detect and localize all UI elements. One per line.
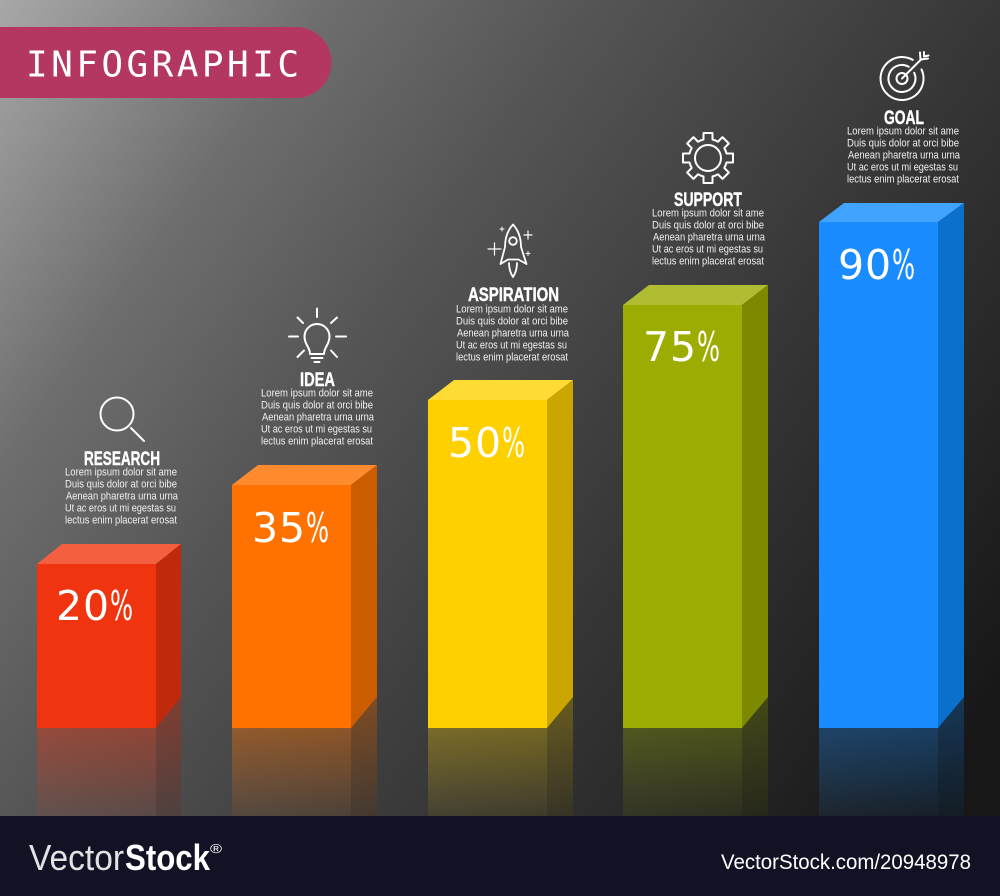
text block: goal: Lorem ipsum dolor sit ame [847, 126, 959, 138]
text block: support: Ut ac eros ut mi egestas su [652, 244, 763, 256]
footer logo: ® [210, 841, 223, 856]
percentage: 20%: % [110, 582, 133, 630]
text block: support [652, 208, 766, 268]
icon: target [881, 52, 928, 100]
3D bar: aspiration [428, 380, 573, 728]
percentage: 90% [838, 241, 915, 289]
footer logo: Vector [29, 837, 124, 878]
bar reflection: idea [232, 697, 377, 816]
text block: goal: Ut ac eros ut mi egestas su [847, 162, 958, 174]
text block: idea [261, 388, 375, 448]
text block: goal: lectus enim placerat erosat [847, 174, 959, 186]
heading: research: RESEARCH [84, 448, 160, 470]
heading: aspiration: ASPIRATION [468, 284, 559, 306]
text block: idea: lectus enim placerat erosat [261, 436, 373, 448]
3D bar: goal [819, 203, 964, 728]
text block: aspiration: Ut ac eros ut mi egestas su [456, 340, 567, 352]
text block: idea: Lorem ipsum dolor sit ame [261, 388, 373, 400]
text block: research: Lorem ipsum dolor sit ame [65, 466, 177, 478]
panel: research [37, 398, 181, 816]
percentage: 35%: % [306, 504, 329, 552]
footer image id: VectorStock.com/20948978 [721, 851, 971, 874]
text block: support: lectus enim placerat erosat [652, 256, 764, 268]
percentage: 20% [56, 582, 133, 630]
text block: idea: Aenean pharetra urna urna [262, 412, 375, 424]
text block: support: Lorem ipsum dolor sit ame [652, 208, 764, 220]
icon: rocket [488, 224, 532, 277]
heading: support: SUPPORT [674, 189, 742, 211]
text block: research: Ut ac eros ut mi egestas su [65, 502, 176, 514]
text block: aspiration: Aenean pharetra urna urna [457, 328, 570, 340]
percentage: 75%: 75 [643, 323, 696, 371]
text block: aspiration: Lorem ipsum dolor sit ame [456, 304, 568, 316]
percentage: 50%: 50 [448, 419, 501, 467]
heading: idea: IDEA [300, 369, 335, 391]
percentage: 20%: 20 [56, 582, 109, 630]
icon: light bulb [289, 308, 346, 362]
panel: aspiration [428, 224, 573, 816]
text block: idea: Duis quis dolor at orci bibe [261, 400, 373, 412]
percentage: 90%: 90 [838, 241, 891, 289]
text block: aspiration [456, 304, 570, 364]
footer band [0, 816, 1000, 896]
3D bar: support [623, 285, 768, 728]
text block: research: Aenean pharetra urna urna [66, 490, 179, 502]
icon: gear [683, 133, 733, 183]
percentage: 50%: % [502, 419, 525, 467]
panel: support [623, 133, 768, 816]
percentage: 75% [643, 323, 720, 371]
title banner [0, 27, 332, 98]
title banner: INFOGRAPHIC [26, 44, 299, 86]
percentage: 35% [252, 504, 329, 552]
text block: research: Duis quis dolor at orci bibe [65, 478, 177, 490]
text block: aspiration: lectus enim placerat erosat [456, 352, 568, 364]
percentage: 50% [448, 419, 525, 467]
text block: research: lectus enim placerat erosat [65, 514, 177, 526]
text block: research [65, 466, 179, 526]
footer logo: Stock [125, 837, 211, 878]
text block: support: Aenean pharetra urna urna [653, 232, 766, 244]
text block: idea: Ut ac eros ut mi egestas su [261, 424, 372, 436]
icon: magnifier [100, 398, 144, 441]
bar reflection: research [37, 697, 181, 816]
3D bar: research [37, 544, 181, 728]
percentage: 90%: % [892, 241, 915, 289]
panel: goal [819, 52, 964, 816]
panel: idea [232, 308, 377, 816]
bar reflection: aspiration [428, 697, 573, 816]
percentage: 75%: % [697, 323, 720, 371]
text block: aspiration: Duis quis dolor at orci bibe [456, 316, 568, 328]
footer logo [29, 837, 223, 878]
text block: goal: Duis quis dolor at orci bibe [847, 138, 959, 150]
3D bar: idea [232, 465, 377, 728]
text block: support: Duis quis dolor at orci bibe [652, 220, 764, 232]
bar reflection: goal [819, 697, 964, 816]
heading: goal: GOAL [884, 107, 924, 129]
bar reflection: support [623, 697, 768, 816]
text block: goal [847, 126, 961, 186]
text block: goal: Aenean pharetra urna urna [848, 150, 961, 162]
percentage: 35%: 35 [252, 504, 305, 552]
